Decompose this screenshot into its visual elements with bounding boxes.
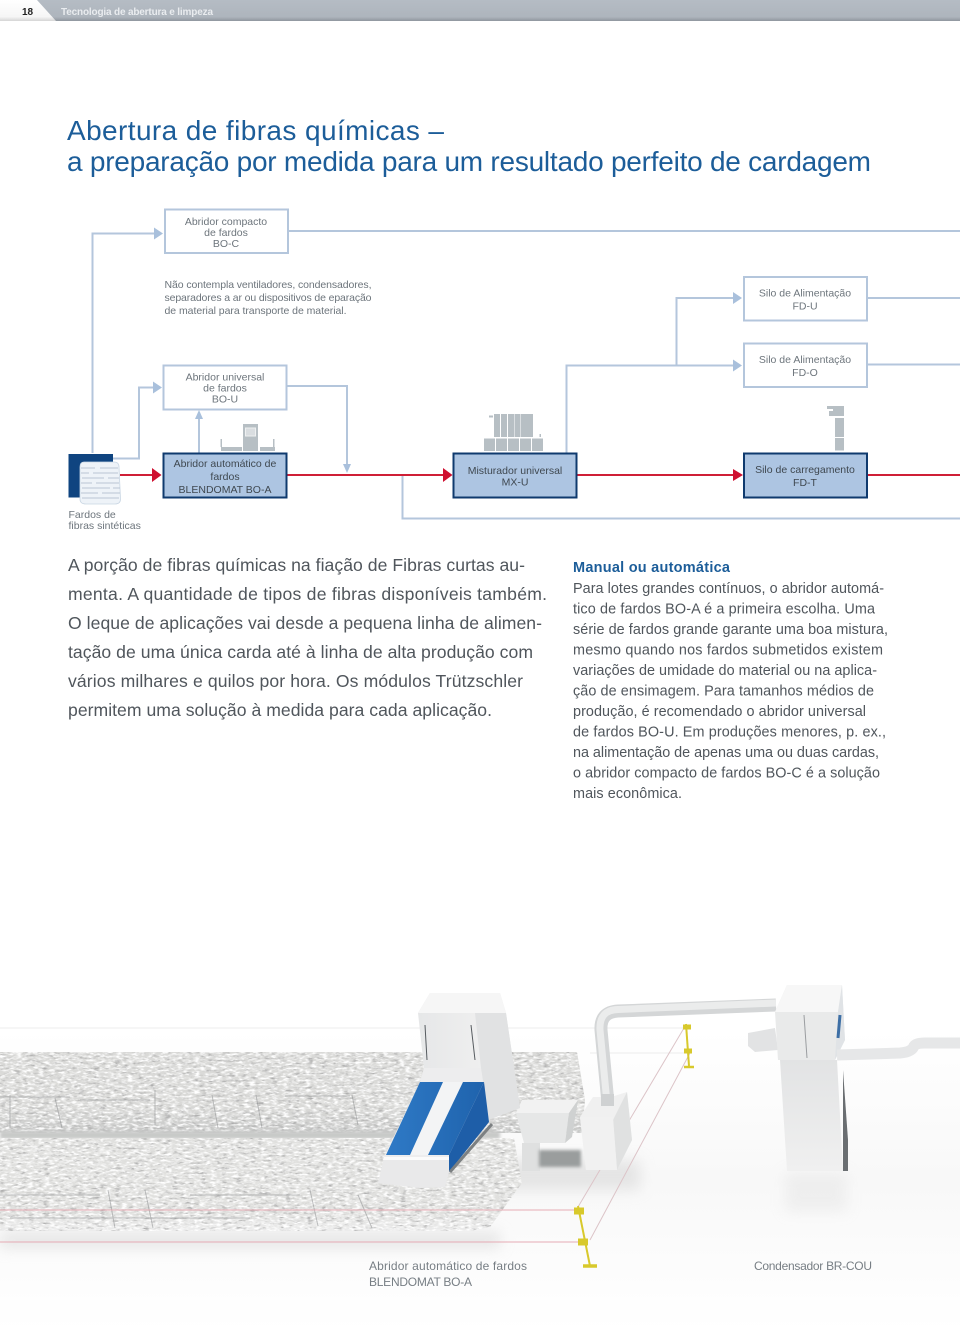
bale row: back — [0, 1052, 585, 1133]
connector: bales to BO-U — [113, 382, 162, 458]
box: BLENDOMAT BO-A: fardos — [210, 471, 240, 483]
box: BLENDOMAT BO-A — [164, 454, 286, 498]
intro paragraph: A porção de fibras químicas na fiação de Fibras curtas au- — [68, 555, 525, 575]
pipe base box front — [580, 1117, 617, 1170]
box: BLENDOMAT BO-A: BLENDOMAT BO-A — [179, 484, 271, 496]
heading: manual or automatic: Manual ou automática — [573, 560, 731, 576]
condenser — [748, 985, 848, 1171]
box: MX-U: MX-U — [502, 476, 528, 488]
note: no fans or condensers — [164, 279, 372, 317]
connector: bypass to bottom line — [402, 476, 960, 518]
title: Abertura de fibras químicas – — [67, 115, 444, 146]
label: synthetic fibre bales: Fardos de — [68, 509, 116, 521]
box: BO-U: BO-U — [212, 394, 238, 406]
safety lines back — [0, 1028, 688, 1053]
note: no fans or condensers: separadores a ar ou dispositivos de eparação — [164, 292, 372, 304]
caption: condenser: Condensador BR-COU — [754, 1259, 872, 1273]
gap between bale rows — [0, 1131, 500, 1139]
blue ramp — [378, 1068, 492, 1188]
icon: BO-A machine — [220, 424, 275, 451]
side paragraph: ção de ensimagem. Para tamanhos médios de — [573, 684, 874, 700]
box: FD-O — [744, 344, 867, 387]
yellow safety post: front — [574, 1206, 597, 1266]
icon: FD-T machine — [827, 406, 844, 450]
connector: FD-U output — [868, 297, 960, 299]
box: FD-U: Silo de Alimentação — [759, 288, 851, 300]
box: BO-U: Abridor universal — [186, 372, 264, 384]
connector: BO-U to red line — [286, 386, 351, 473]
pipe base box — [580, 1092, 632, 1170]
connector: MX-U to FD-O — [566, 360, 742, 453]
side paragraph: Para lotes grandes contínuos, o abridor automá- — [573, 581, 884, 597]
side paragraph: série de fardos grande garante uma boa mistura, — [573, 622, 888, 638]
intro paragraph — [68, 555, 547, 720]
outlet pipe — [837, 1043, 960, 1055]
box: BO-C: BO-C — [213, 238, 240, 250]
side paragraph: mais econômica. — [573, 786, 682, 802]
label: synthetic fibre bales — [68, 509, 141, 532]
caption: BO-A: Abridor automático de fardos — [369, 1259, 527, 1273]
icon: synthetic fibre bales — [68, 454, 120, 504]
connector: FD-O output — [868, 364, 960, 366]
side paragraph: na alimentação de apenas uma ou duas cardas, — [573, 745, 879, 761]
pipe to condenser — [600, 1003, 776, 1103]
safety lines diagonal — [578, 1028, 690, 1240]
note: no fans or condensers: de material para transporte de material. — [164, 305, 346, 317]
caption: BO-A: BLENDOMAT BO-A — [369, 1275, 472, 1289]
box: BO-U: de fardos — [203, 382, 247, 394]
box: FD-U: FD-U — [792, 300, 818, 312]
box: MX-U — [454, 454, 576, 498]
side paragraph: de fardos BO-U. Em produções menores, p. ex., — [573, 724, 886, 740]
intro paragraph: permitem uma solução à medida para cada aplicação. — [68, 700, 492, 720]
title: a preparação por medida para um resultado perfeito de cardagem — [67, 146, 871, 177]
caption: BO-A — [369, 1259, 527, 1289]
connector: bales to BO-C — [92, 228, 163, 453]
safety lines red — [0, 1210, 578, 1242]
side paragraph: tico de fardos BO-A é a primeira escolha. Uma — [573, 602, 875, 618]
red material line — [120, 468, 960, 482]
feeder base — [516, 1100, 581, 1171]
page number tab — [0, 0, 56, 21]
box: MX-U: Misturador universal — [468, 465, 562, 477]
intro paragraph: tação de uma única carda até à linha de alta produção com — [68, 642, 533, 662]
header bar — [0, 0, 960, 21]
side paragraph: mesmo quando nos fardos submetidos existem — [573, 642, 883, 658]
connector: BO-A to BO-U — [195, 410, 203, 453]
yellow safety post: back — [683, 1024, 694, 1067]
box: FD-O: Silo de Alimentação — [759, 354, 851, 366]
flow diagram — [68, 210, 960, 532]
box: BO-C — [165, 210, 288, 253]
box: BO-C: Abridor compacto — [185, 216, 267, 228]
box: BO-U — [164, 366, 286, 410]
box: FD-T: Silo de carregamento — [755, 464, 855, 476]
section title: Tecnologia de abertura e limpeza — [61, 7, 213, 18]
floor shadows — [0, 1160, 847, 1248]
machine illustration — [0, 985, 960, 1331]
note: no fans or condensers: Não contempla ventiladores, condensadores, — [164, 279, 372, 291]
box: FD-T: FD-T — [793, 477, 818, 489]
intro paragraph: O leque de aplicações vai desde a pequena linha de alimen- — [68, 613, 542, 633]
box: FD-U — [744, 277, 867, 320]
connector: BO-C output — [288, 230, 960, 232]
side paragraph: produção, é recomendado o abridor universal — [573, 704, 866, 720]
icon: MX-U machine — [484, 414, 543, 451]
intro paragraph: vários milhares e quilos por hora. Os módulos Trützschler — [68, 671, 523, 691]
connector: branch to FD-U — [676, 292, 742, 365]
side paragraph — [573, 581, 888, 802]
side paragraph: variações de umidade do material ou na aplica- — [573, 663, 877, 679]
floor — [0, 1030, 960, 1331]
page number tab: 18 — [22, 7, 34, 18]
box: BLENDOMAT BO-A: Abridor automático de — [174, 458, 277, 470]
side paragraph: o abridor compacto de fardos BO-C é a solução — [573, 766, 880, 782]
bale row: front — [0, 1138, 522, 1231]
intro paragraph: menta. A quantidade de tipos de fibras disponíveis também. — [68, 584, 547, 604]
box: BO-C: de fardos — [204, 227, 248, 239]
title — [67, 115, 871, 177]
label: synthetic fibre bales: fibras sintéticas — [68, 520, 141, 532]
box: FD-T — [744, 454, 867, 498]
box: FD-O: FD-O — [792, 367, 818, 379]
tower — [418, 993, 520, 1120]
